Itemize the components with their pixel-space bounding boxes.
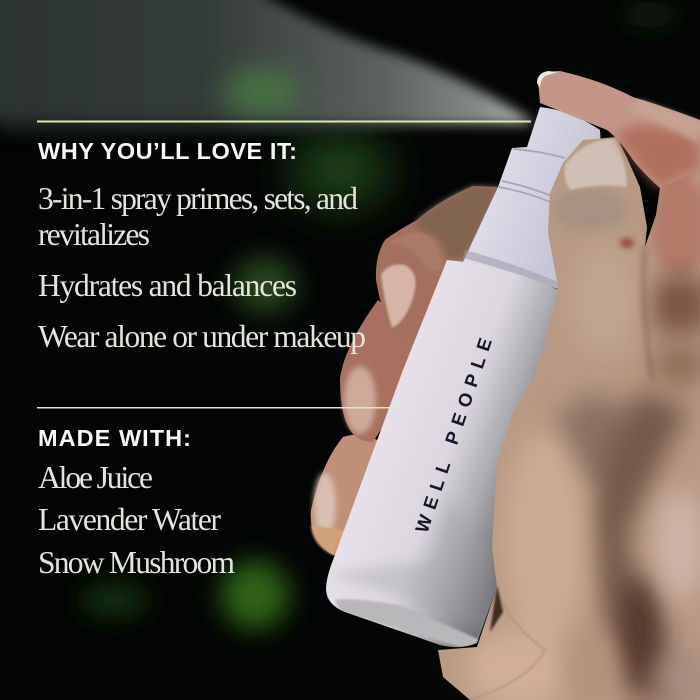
benefits list: revitalizes bbox=[38, 217, 150, 252]
bottle base bbox=[334, 510, 495, 647]
heading: why you'll love it: WHY YOU’LL LOVE IT: bbox=[38, 138, 297, 164]
benefits list: Hydrates and balances bbox=[38, 268, 297, 303]
ingredients list: Snow Mushroom bbox=[38, 545, 235, 580]
bottle bbox=[326, 107, 610, 650]
back finger with nail bbox=[376, 186, 500, 338]
bottle shadow under shoulder bbox=[463, 250, 558, 290]
middle finger bbox=[340, 300, 420, 442]
ingredients list: Lavender Water bbox=[38, 502, 222, 537]
ingredients list: Aloe Juice bbox=[38, 460, 153, 495]
ingredients list bbox=[38, 460, 235, 580]
bottle brand text: WELL PEOPLE bbox=[411, 335, 496, 535]
pump nozzle and neck bbox=[463, 107, 610, 300]
divider line top bbox=[37, 120, 531, 122]
benefits list bbox=[38, 181, 366, 354]
divider line middle bbox=[37, 407, 397, 408]
benefits list: Wear alone or under makeup bbox=[38, 319, 366, 354]
benefits list: 3-in-1 spray primes, sets, and bbox=[38, 181, 358, 216]
thumbnail bbox=[565, 139, 627, 190]
third finger bbox=[311, 435, 385, 560]
hand and thumb bbox=[438, 137, 700, 700]
spray mist bbox=[0, 0, 532, 135]
heading: made with: MADE WITH: bbox=[38, 425, 191, 451]
index finger bbox=[537, 71, 700, 188]
bottle body bbox=[326, 260, 560, 647]
